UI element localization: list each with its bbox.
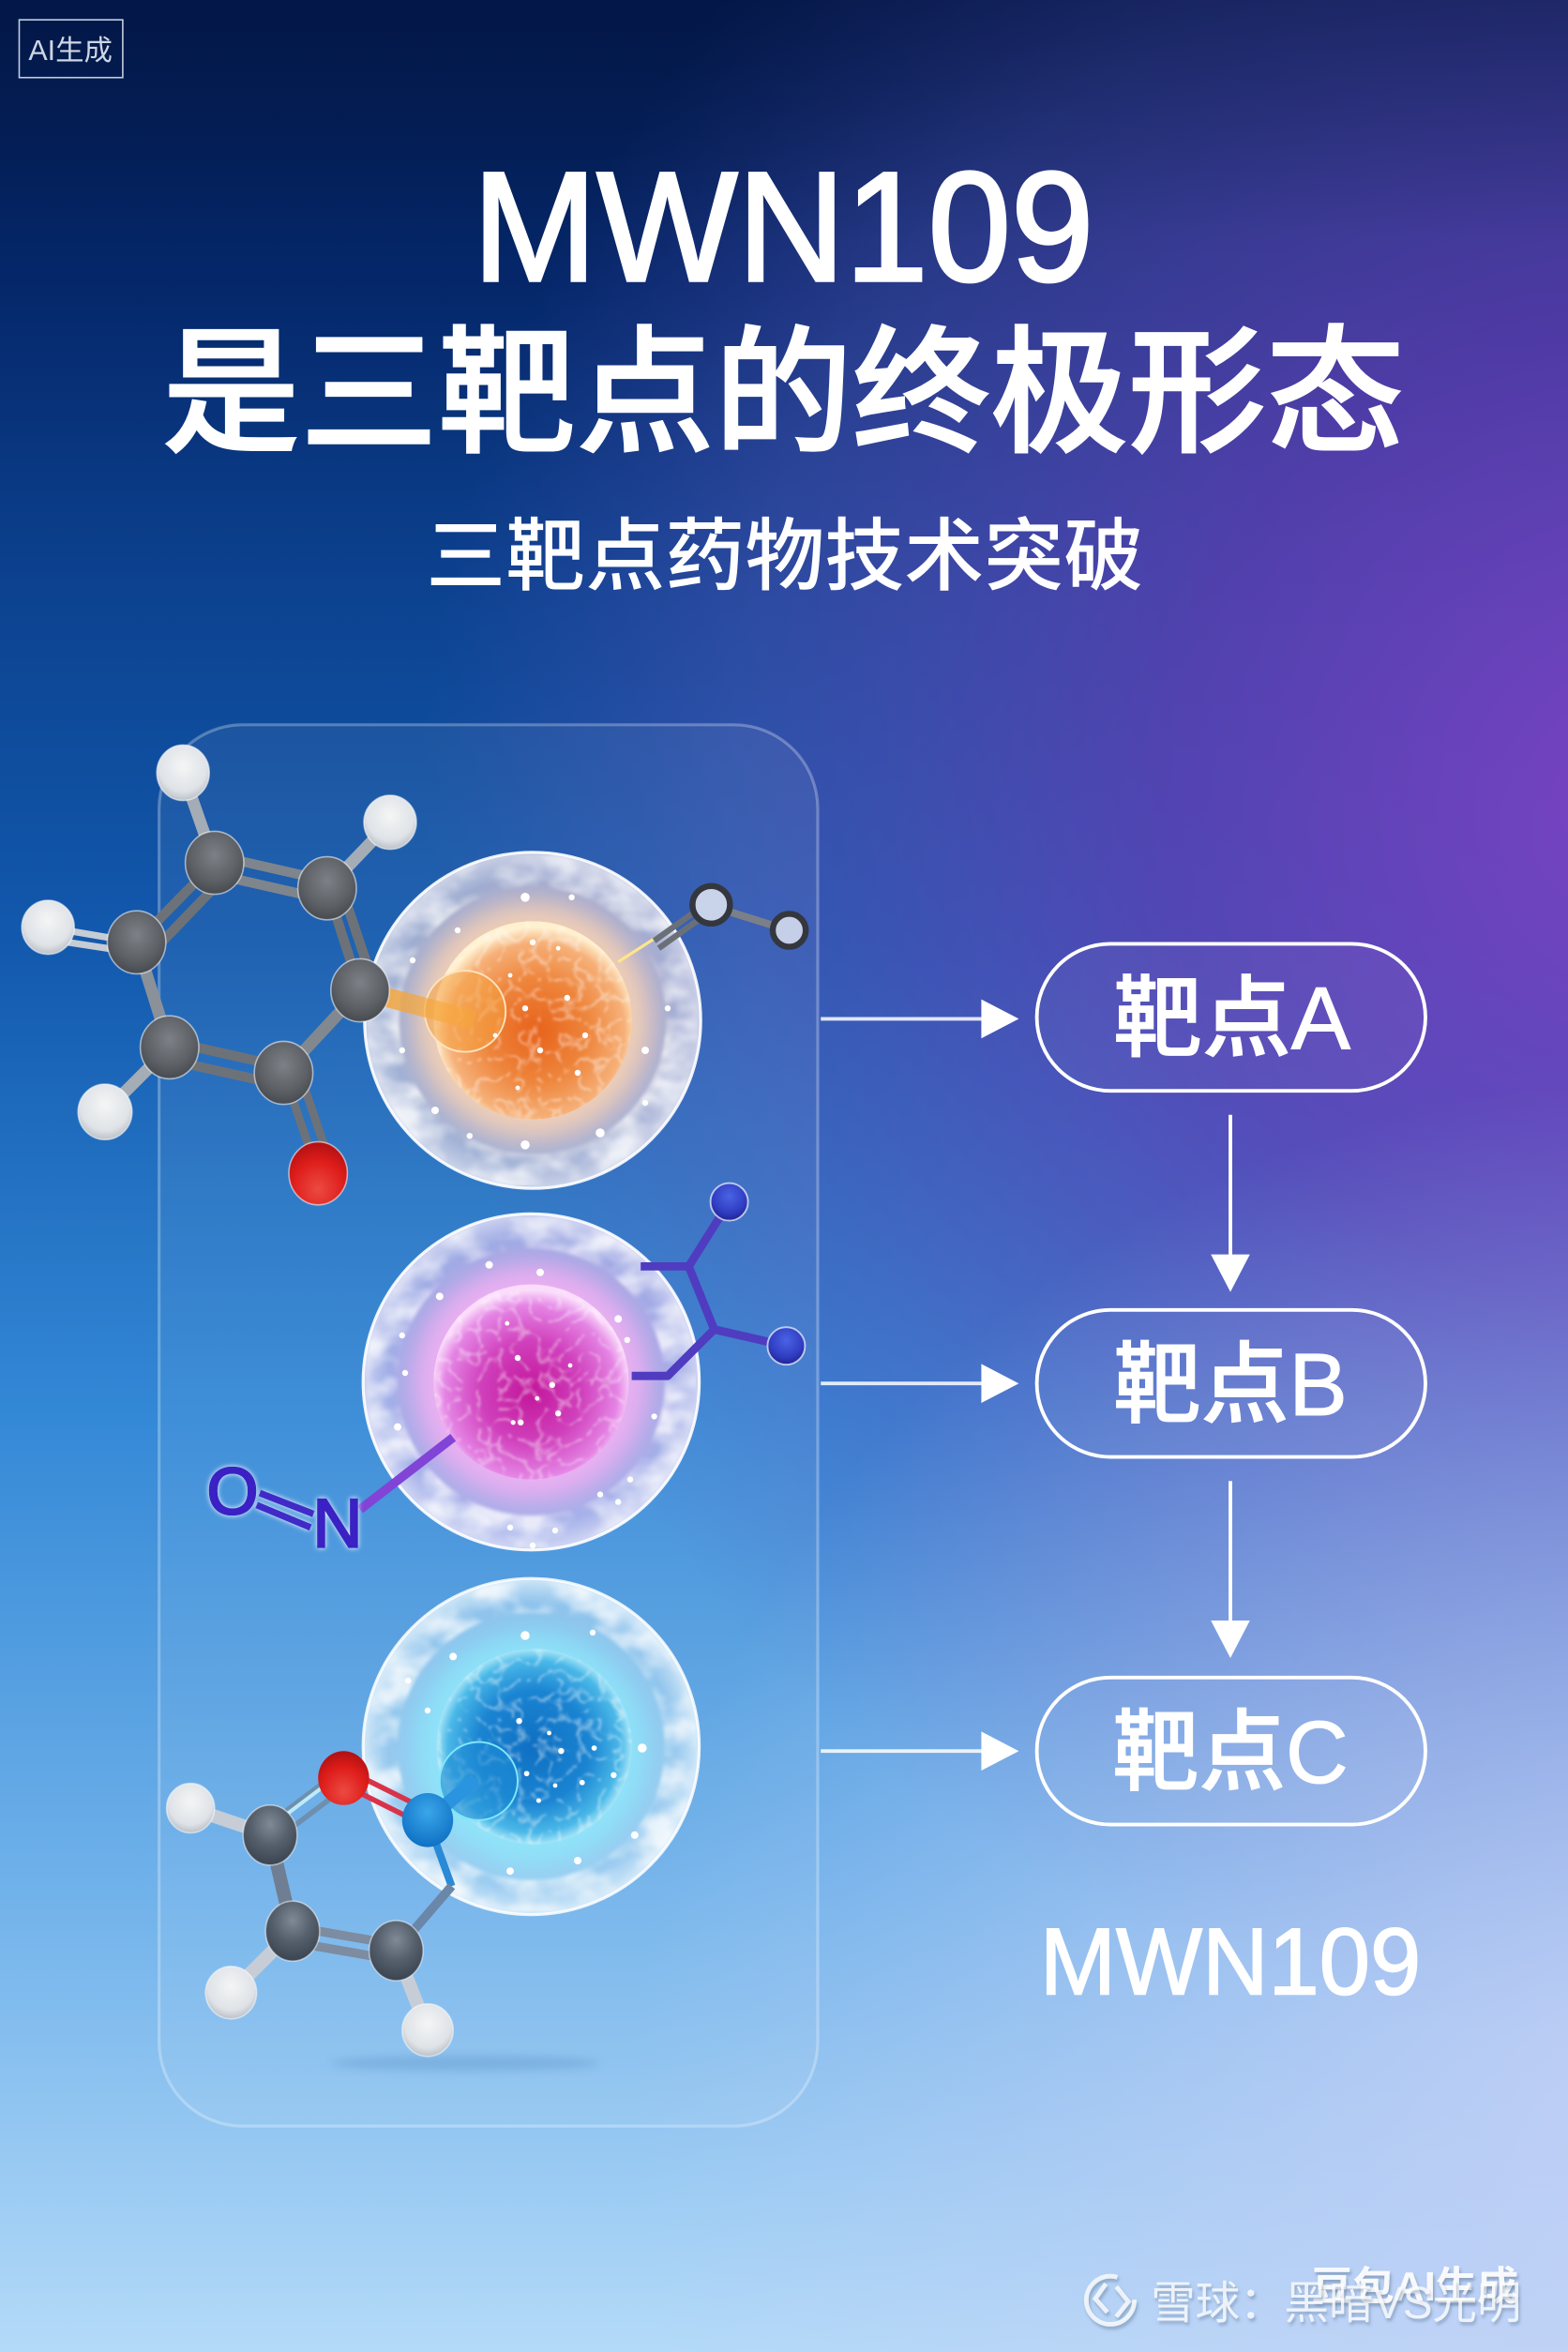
- title: 是三靶点的终极形态: [162, 317, 1405, 471]
- label: MWN109: MWN109: [1040, 1909, 1421, 2014]
- glass panel: [159, 725, 818, 2126]
- pill: 靶点C: 靶点C: [1112, 1704, 1349, 1802]
- molecule B: O=N group: O: [207, 1454, 258, 1528]
- arrow: B to C: [1211, 1481, 1250, 1658]
- pill: 靶点B: [1037, 1310, 1425, 1457]
- arrow: A to B: [1211, 1115, 1250, 1292]
- pill: 靶点A: 靶点A: [1113, 970, 1350, 1068]
- molecule A: ball-and-stick ring: [22, 745, 475, 1205]
- subtitle: 三靶点药物技术突破: [426, 511, 1143, 600]
- pill: 靶点A: [1037, 943, 1425, 1091]
- arrow: cell B to target B: [821, 1364, 1018, 1403]
- molecule B: O=N group: N: [312, 1485, 363, 1562]
- molecule B: O=N group: [207, 1438, 453, 1562]
- molecule B: branched chain: [632, 1184, 805, 1376]
- badge: AI生成: AI生成: [28, 35, 113, 67]
- pill: 靶点C: [1037, 1678, 1425, 1825]
- title: MWN109: [473, 140, 1093, 314]
- cell B (magenta): [363, 1214, 700, 1550]
- molecule C: ring with atoms: [167, 1751, 600, 2071]
- pill: 靶点B: 靶点B: [1113, 1336, 1348, 1435]
- watermark: 雪球 logo and name: 雪球：黑暗VS光明: [1151, 2279, 1521, 2329]
- arrow: cell A to target A: [821, 1000, 1018, 1038]
- cell C (blue): [363, 1578, 700, 1915]
- watermark: 豆包AI生成: 豆包AI生成: [1311, 2265, 1518, 2310]
- badge: AI生成: [19, 20, 123, 78]
- cell A (orange): [365, 852, 701, 1188]
- title: [162, 140, 1405, 471]
- arrow: cell C to target C: [821, 1731, 1018, 1771]
- molecule A: side chain: [618, 886, 806, 962]
